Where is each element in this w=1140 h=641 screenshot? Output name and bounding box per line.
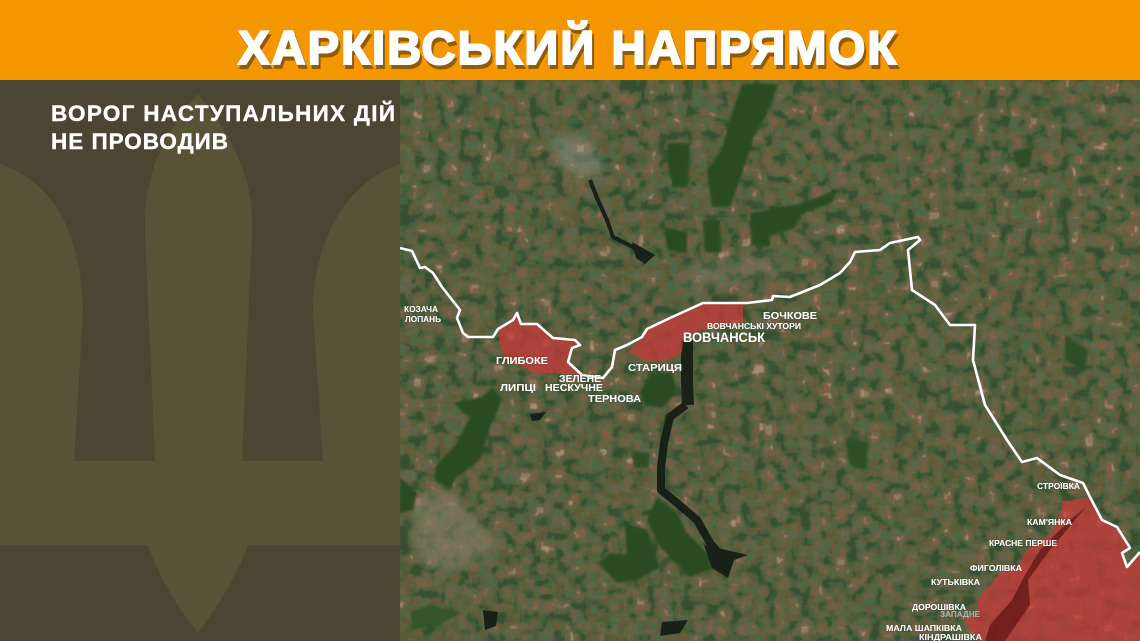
label: Lyptsi: ЛИПЦІ (500, 382, 536, 394)
occupied area: Hlyboke (498, 313, 582, 375)
label: Doroshivka: ДОРОШІВКА (912, 602, 966, 612)
label: Vovchanski Khutory: ВОВЧАНСЬКІ ХУТОРИ (707, 322, 801, 331)
label: Neskuchne: НЕСКУЧНЕ (545, 382, 603, 394)
label: Kozacha Lopan: КОЗАЧА (404, 305, 438, 314)
label: Krasne Pershe: КРАСНЕ ПЕРШЕ (989, 538, 1057, 548)
label: Zapadne: ЗАПАДНЕ (940, 609, 980, 619)
label: Zelene: ЗЕЛЕНЕ (559, 373, 601, 385)
satellite map (400, 80, 1140, 641)
label: Fyholivka: ФИГОЛІВКА (970, 563, 1022, 573)
label: Kamianka: КАМ'ЯНКА (1027, 517, 1072, 527)
label: Starytsia: СТАРИЦЯ (628, 362, 682, 374)
label: Mala Shapkivka: МАЛА ШАПКІВКА (886, 623, 962, 633)
label: Vovchansk: ВОВЧАНСЬК (683, 330, 766, 345)
occupied area: Vovchansk (628, 303, 743, 362)
frontline border (400, 237, 1140, 567)
title: ХАРКІВСЬКИЙ НАПРЯМОК (238, 21, 896, 74)
header bar (0, 0, 1140, 80)
left panel (0, 80, 400, 641)
settlement labels (404, 305, 1080, 641)
label: Kozacha Lopan: ЛОПАНЬ (405, 315, 441, 324)
occupied area: south-east (963, 497, 1140, 641)
label: Kozacha Lopan (404, 305, 441, 324)
panel text (51, 101, 395, 154)
towns (412, 132, 800, 572)
panel text: НЕ ПРОВОДИВ (51, 129, 228, 154)
forests and rivers (400, 84, 1088, 630)
panel text: ВОРОГ НАСТУПАЛЬНИХ ДІЙ (51, 101, 395, 126)
label: Bochkove: БОЧКОВЕ (763, 310, 817, 322)
icon: trident watermark (0, 94, 400, 633)
label: Hlyboke: ГЛИБОКЕ (496, 355, 548, 367)
label: Stroivka: СТРОЇВКА (1037, 481, 1080, 491)
label: Ternova: ТЕРНОВА (588, 393, 641, 405)
label: Kutkivka: КУТЬКІВКА (931, 577, 980, 587)
